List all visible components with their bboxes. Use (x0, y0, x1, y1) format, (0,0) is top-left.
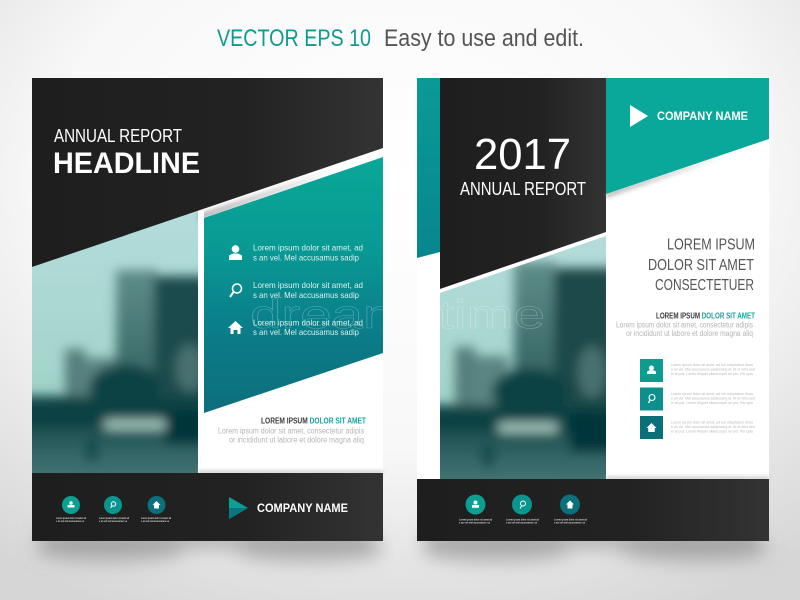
text: item three: Lorem ipsum dolor sit amet, ad (253, 318, 363, 328)
tile text two: Lorem ipsum dolor sit amet, ad los voluptatum diras (671, 392, 753, 396)
text: item one: s an vel. Mel accusamus sadip (253, 252, 359, 262)
heading: three lines: CONSECTETUER (655, 277, 754, 294)
teal header (606, 78, 769, 194)
tile text three (671, 420, 755, 434)
watermark: dreamstime (250, 293, 545, 337)
black header shape (32, 78, 383, 267)
photo: blurred city (32, 210, 198, 473)
footer captions: Lorem ipsum dolor sit amet ad (459, 518, 492, 522)
text: item three: s an vel. Mel accusamus sadip (253, 327, 359, 337)
footer icon: house (148, 496, 166, 514)
tile text two (671, 392, 755, 405)
footer icon: person (466, 494, 486, 514)
heading: three lines (648, 236, 755, 294)
footer captions: Lorem ipsum dolor sit amet ad (99, 516, 129, 520)
page base (32, 78, 383, 541)
icon: search (230, 284, 242, 297)
heading banner (217, 25, 584, 52)
teal strip (417, 78, 440, 258)
body text: Lorem ipsum dolor sit amet, consectetur adipis (218, 426, 364, 436)
teal panel (204, 157, 383, 413)
year: 2017 (474, 130, 571, 179)
footer shadow (198, 470, 383, 474)
icon tile: search (640, 388, 663, 410)
heading: vector eps: VECTOR EPS 10 (217, 25, 371, 52)
tile text two: ei at pos. Lorem Aliquet ullamcorper ne pro. Per quis (671, 401, 753, 405)
icon: house (228, 321, 243, 334)
company name: COMPANY NAME (257, 501, 348, 515)
tile text one: Lorem ipsum dolor sit amet, ad los voluptatum diras (671, 363, 753, 367)
icon tile: house (640, 416, 663, 439)
tile text one: ei at pos. Lorem Aliquet ullamcorper ne pro. Per quis (671, 372, 753, 376)
footer captions: Lorem ipsum dolor sit amet ad (506, 518, 539, 522)
tile text three: Lorem ipsum dolor sit amet, ad los voluptatum diras (671, 420, 753, 424)
panel: left brochure (10, 78, 383, 541)
text: item two: Lorem ipsum dolor sit amet, ad (253, 280, 363, 290)
title: annual report: ANNUAL REPORT (54, 125, 182, 146)
footer icon: search (104, 496, 122, 514)
body text: Lorem ipsum dolor sit amet, consectetur adipis (616, 320, 753, 330)
text: item one (253, 242, 363, 262)
company name: COMPANY NAME (657, 111, 748, 123)
heading: three lines: LOREM IPSUM (667, 236, 755, 254)
logo triangle (630, 105, 648, 127)
white band over photo edge (198, 210, 204, 473)
body text (218, 426, 364, 444)
footer bar (417, 479, 769, 541)
diagonal shadow (606, 138, 768, 198)
title: headline: HEADLINE (53, 147, 200, 180)
annual report: ANNUAL REPORT (460, 178, 586, 199)
footer captions: s an vel mel accusamus sa (506, 520, 537, 524)
drop shadows beneath brochures (35, 530, 770, 563)
tile text two: s an vel. Mel accusamus sadipscing at. At et rebo sed (671, 396, 755, 400)
footer captions: s an vel mel accusamus sa (459, 520, 490, 524)
photo: blurred city (440, 236, 606, 479)
text: item three (253, 318, 363, 337)
body text: or incididunt ut labore et dolore magna aliq (229, 436, 364, 444)
heading: easy to use: Easy to use and edit. (384, 25, 584, 52)
footer icon: house (560, 494, 580, 514)
diagonal shadow (198, 152, 383, 221)
footer captions: Lorem ipsum dolor sit amet ad (56, 516, 86, 520)
subheading: LOREM IPSUM DOLOR SIT AMET (261, 416, 366, 426)
footer icon: person (62, 496, 80, 514)
footer bar (32, 473, 383, 541)
footer captions: s an vel mel accusamus sa (99, 519, 127, 523)
tile text three: s an vel. Mel accusamus sadipscing at. At et rebo sed (671, 425, 755, 429)
heading: three lines: DOLOR SIT AMET (648, 257, 754, 274)
footer captions: Lorem ipsum dolor sit amet ad (141, 516, 171, 520)
tile text one (671, 363, 755, 376)
footer icon: search (512, 494, 532, 514)
footer captions (56, 516, 171, 523)
footer captions: s an vel mel accusamus sa (56, 519, 84, 523)
footer captions: s an vel mel accusamus sa (554, 520, 585, 524)
page base (417, 78, 769, 541)
black column (440, 78, 606, 289)
subheading: LOREM IPSUM DOLOR SIT AMET (656, 312, 755, 320)
text: item two: s an vel. Mel accusamus sadip (253, 290, 359, 300)
body text: or incididunt ut labore et dolore magna aliq (626, 329, 753, 338)
logo triangle (229, 497, 248, 519)
tile text one: s an vel. Mel accusamus sadipscing at. At et rebo sed (671, 368, 755, 372)
icon tile: person (640, 359, 663, 382)
tile text three: ei at pos. Lorem Aliquet ullamcorper ne pro. Per quis (671, 430, 753, 434)
footer captions: s an vel mel accusamus sa (141, 519, 169, 523)
body text (616, 320, 753, 338)
footer captions: Lorem ipsum dolor sit amet ad (554, 518, 587, 522)
icon: person (229, 245, 242, 260)
panel: right brochure (417, 78, 769, 541)
footer shadow (606, 476, 769, 480)
text: item one: Lorem ipsum dolor sit amet, ad (253, 242, 363, 252)
footer captions (459, 518, 587, 524)
text: item two (253, 280, 363, 300)
